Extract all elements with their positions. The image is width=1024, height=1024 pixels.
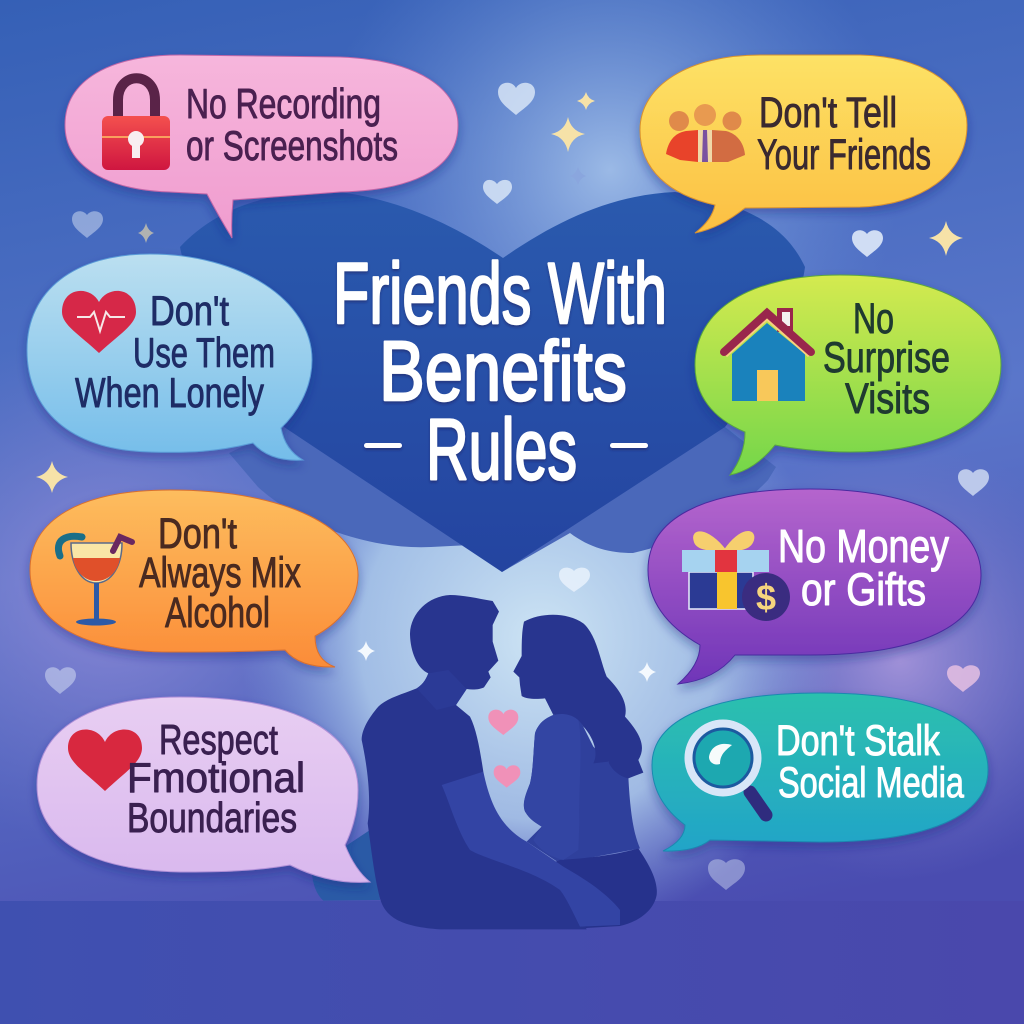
large central heart — [180, 190, 805, 572]
text: or Gifts — [801, 564, 926, 615]
woman arm — [524, 713, 581, 860]
text: Alcohol — [165, 589, 270, 637]
text — [139, 510, 301, 637]
title: Rules — [426, 402, 577, 498]
icon: cocktail glass — [58, 536, 132, 626]
text: Visits — [845, 375, 930, 423]
text: Surprise — [823, 334, 950, 382]
text: No Recording — [186, 80, 381, 127]
text: Use Them — [133, 329, 275, 376]
man — [362, 595, 587, 929]
woman legs — [513, 848, 657, 928]
icon: gift and dollar coin: $ — [756, 577, 776, 618]
bubble: no money or gifts — [648, 489, 981, 684]
text: Fmotional — [127, 754, 305, 801]
text: Boundaries — [127, 794, 297, 841]
title — [333, 246, 667, 498]
text: Always Mix — [139, 549, 301, 597]
text — [127, 716, 305, 841]
text: Don't Stalk — [776, 717, 940, 765]
couple silhouette — [312, 595, 657, 929]
woman body — [524, 713, 640, 863]
bubble: no recording — [65, 55, 458, 238]
text: or Screenshots — [186, 122, 398, 169]
icon: magnifying glass — [689, 724, 766, 815]
text — [778, 520, 949, 615]
text — [757, 89, 931, 179]
man neck — [417, 670, 467, 710]
icon: house — [724, 308, 811, 401]
text — [776, 717, 964, 807]
foot behind man — [312, 830, 380, 901]
icon: padlock — [102, 78, 170, 170]
icon: friends — [666, 104, 745, 162]
pink hearts — [488, 710, 518, 735]
icon: red heart — [68, 730, 142, 791]
text: Respect — [159, 716, 278, 763]
title: Friends With — [333, 246, 667, 342]
text: Don't Tell — [759, 89, 897, 137]
text: Social Media — [778, 759, 964, 807]
icon: heartbeat heart — [62, 291, 136, 353]
text: No — [853, 295, 894, 343]
text: No Money — [778, 520, 949, 572]
bubble: respect emotional boundaries — [37, 697, 370, 882]
woman head and hair — [513, 615, 643, 778]
bubble: don't use them when lonely — [27, 254, 312, 460]
text — [75, 287, 275, 416]
bubble: no surprise visits — [695, 275, 1001, 475]
man arm — [442, 772, 620, 927]
text: Don't — [150, 287, 229, 334]
title: Benefits — [379, 324, 627, 418]
bubble: don't stalk social media — [652, 693, 988, 851]
text: Your Friends — [757, 131, 931, 179]
text: Don't — [158, 510, 237, 558]
bubble: don't always mix alcohol — [30, 490, 358, 667]
text — [186, 80, 398, 169]
bubble: don't tell your friends — [640, 55, 967, 233]
decorative hearts and sparkles — [36, 83, 989, 890]
icon: gift and dollar coin — [682, 532, 790, 621]
text — [823, 295, 950, 423]
text: When Lonely — [75, 369, 264, 416]
